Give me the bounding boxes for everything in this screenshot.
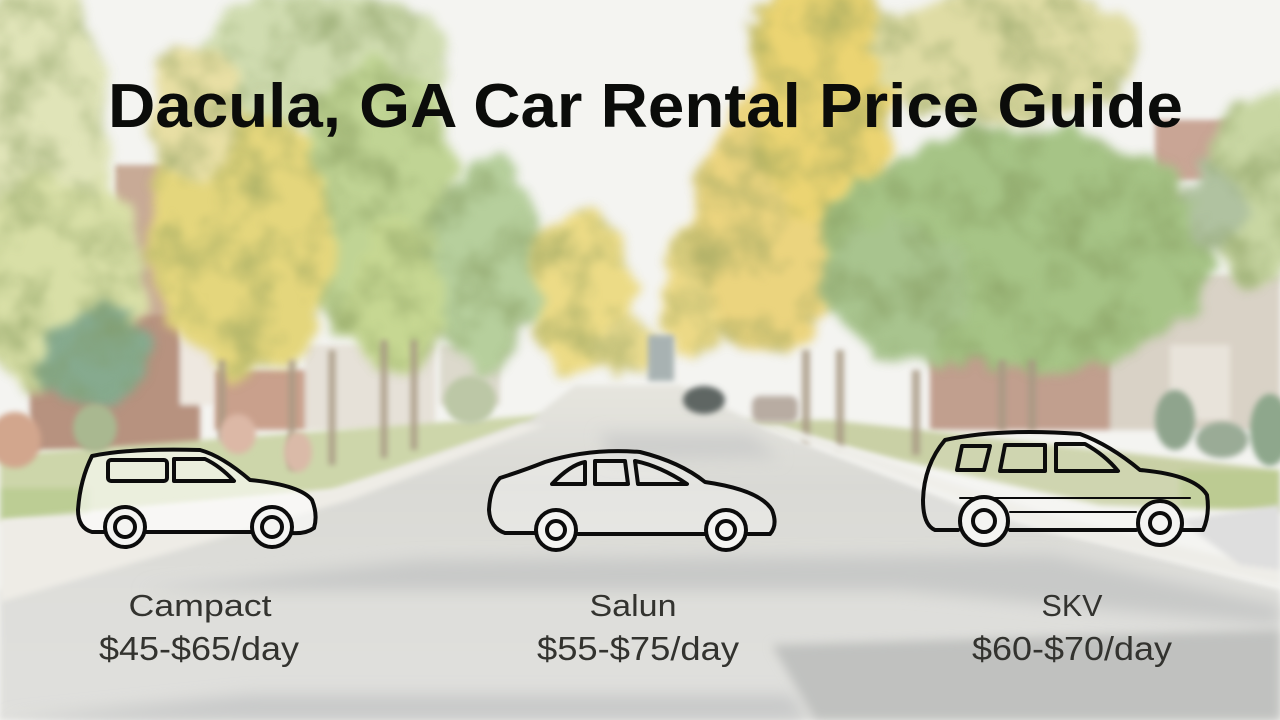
label: saloon: Salun — [590, 588, 676, 623]
right trees — [659, 0, 1280, 370]
icon: SUV — [923, 432, 1208, 545]
label: compact: Campact — [128, 588, 272, 623]
right houses — [930, 120, 1280, 430]
left trees — [0, 0, 651, 405]
price: compact: $45-$65/day — [99, 630, 300, 667]
icon: compact car — [78, 450, 316, 547]
bushes — [0, 376, 1280, 472]
sidewalks — [0, 425, 1280, 602]
road shadows — [0, 434, 1280, 720]
price: SUV: $60-$70/day — [972, 630, 1173, 667]
distant parked cars — [648, 335, 798, 422]
road shadow: lower right — [772, 630, 1280, 720]
left houses — [30, 165, 500, 450]
title: Dacula, GA Car Rental Price Guide — [108, 72, 1183, 141]
icon: saloon car — [489, 451, 775, 550]
price: saloon: $55-$75/day — [537, 630, 740, 667]
label: SUV: SKV — [1042, 588, 1103, 623]
road — [0, 385, 1280, 720]
tree trunks — [222, 340, 1032, 470]
lawns — [0, 415, 1280, 522]
